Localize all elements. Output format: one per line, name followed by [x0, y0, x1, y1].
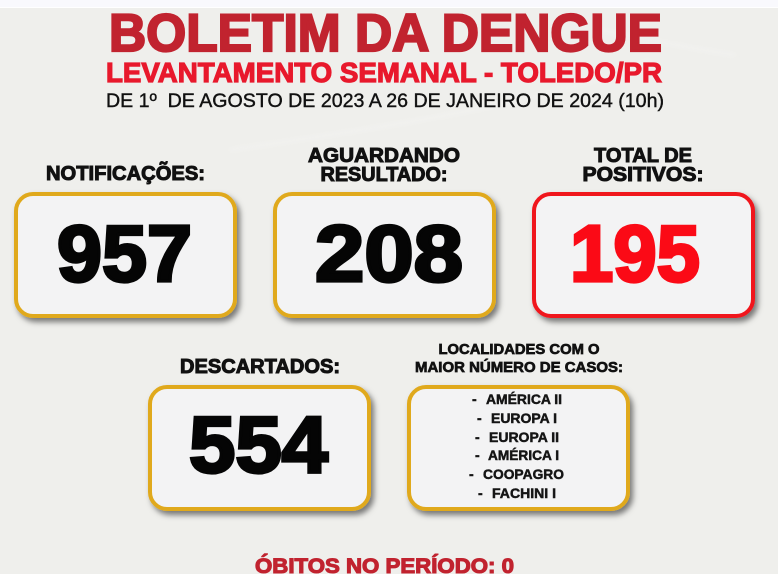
list of localities: AMÉRICA I: [488, 447, 559, 463]
label: notificações: NOTIFICAÇÕES:: [46, 161, 205, 185]
list of localities: -: [475, 429, 480, 445]
card: aguardando resultado: [275, 194, 494, 316]
list of localities: EUROPA II: [489, 429, 559, 445]
list of localities: -: [477, 410, 482, 426]
panel: aguardando resultado: [275, 145, 494, 316]
list of localities: COOPAGRO: [483, 466, 564, 482]
panel: notificações: [16, 161, 235, 316]
label line 2: aguardando resultado: RESULTADO:: [320, 164, 448, 186]
list of localities: -: [475, 447, 480, 463]
label line 2: localidades: MAIOR NÚMERO DE CASOS:: [415, 358, 623, 376]
list of localities: -: [478, 485, 483, 501]
card: descartados: [150, 387, 369, 509]
value: total de positivos: 195: [570, 209, 700, 298]
list of localities: AMÉRICA II: [486, 391, 562, 407]
card: notificações: [16, 194, 235, 316]
label: localidades: LOCALIDADES COM O: [438, 342, 600, 358]
panel: total de positivos: [534, 145, 753, 316]
deaths in period: ÓBITOS NO PERÍODO: 0: [255, 554, 514, 578]
title: BOLETIM DA DENGUE: [109, 4, 662, 63]
list of localities: -: [469, 466, 474, 482]
list of localities: -: [472, 391, 477, 407]
label: total de positivos: TOTAL DE: [594, 145, 692, 167]
panel: localidades: [409, 342, 628, 509]
list of localities: [469, 391, 564, 501]
value: aguardando resultado: 208: [315, 209, 463, 298]
value: descartados: 554: [189, 400, 329, 489]
card: localidades: [409, 387, 628, 509]
value: notificações: 957: [57, 209, 192, 298]
label: descartados: DESCARTADOS:: [180, 356, 340, 378]
header: [106, 4, 664, 112]
label line 2: total de positivos: POSITIVOS:: [582, 164, 704, 186]
panel: descartados: [150, 356, 369, 509]
list of localities: EUROPA I: [491, 410, 557, 426]
list of localities: FACHINI I: [492, 485, 556, 501]
card: total de positivos: [534, 194, 753, 316]
subtitle: LEVANTAMENTO SEMANAL - TOLEDO/PR: [106, 57, 662, 88]
label: aguardando resultado: AGUARDANDO: [308, 145, 460, 167]
date range: DE 1º DE AGOSTO DE 2023 A 26 DE JANEIRO DE 2024 (10h): [106, 91, 664, 112]
